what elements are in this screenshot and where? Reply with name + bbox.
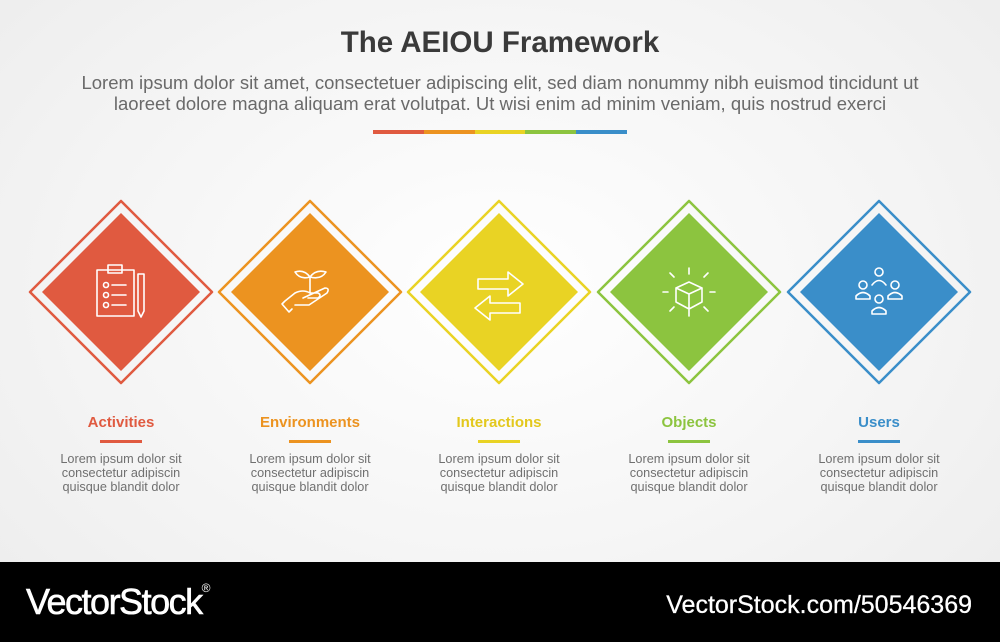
- footer brand: VectorStock®: [26, 581, 209, 622]
- item: interactions: consectetur adipiscin: [440, 466, 558, 480]
- diamond: users: [788, 201, 970, 383]
- item: users: [818, 414, 940, 494]
- diamond: activities: [30, 201, 212, 383]
- item: objects: quisque blandit dolor: [630, 480, 748, 494]
- item: activities: Activities: [88, 414, 154, 431]
- item: interactions: quisque blandit dolor: [440, 480, 558, 494]
- item: users: Users: [858, 414, 900, 431]
- footer url: VectorStock.com/50546369: [666, 591, 972, 619]
- diamond: environments: [219, 201, 401, 383]
- item: environments: Environments: [260, 414, 360, 431]
- title: The AEIOU Framework: [341, 26, 659, 59]
- item: objects: consectetur adipiscin: [630, 466, 748, 480]
- item: users: Lorem ipsum dolor sit: [818, 452, 940, 466]
- item: objects: [628, 414, 750, 494]
- item: interactions: Interactions: [456, 414, 542, 431]
- item: interactions: [438, 414, 560, 494]
- item: interactions: Lorem ipsum dolor sit: [438, 452, 560, 466]
- item: activities: quisque blandit dolor: [62, 480, 180, 494]
- item: users: quisque blandit dolor: [820, 480, 938, 494]
- subtitle: laoreet dolore magna aliquam erat volutpat. Ut wisi enim ad minim veniam, quis nostrud exerci: [114, 93, 886, 114]
- item: environments: [249, 414, 371, 494]
- footer: [0, 562, 1000, 642]
- item: objects: Lorem ipsum dolor sit: [628, 452, 750, 466]
- item: activities: [60, 414, 182, 494]
- labels: [60, 414, 940, 494]
- item: objects: Objects: [661, 414, 717, 431]
- item: environments: Lorem ipsum dolor sit: [249, 452, 371, 466]
- item: users: consectetur adipiscin: [820, 466, 938, 480]
- item: activities: Lorem ipsum dolor sit: [60, 452, 182, 466]
- diamond: interactions: [408, 201, 590, 383]
- item: activities: consectetur adipiscin: [62, 466, 180, 480]
- color bar: [373, 130, 627, 134]
- subtitle: Lorem ipsum dolor sit amet, consectetuer adipiscing elit, sed diam nonummy nibh euismod tincidunt ut: [81, 72, 919, 93]
- item: environments: quisque blandit dolor: [251, 480, 369, 494]
- diamond: objects: [598, 201, 780, 383]
- item: environments: consectetur adipiscin: [251, 466, 369, 480]
- subtitle: [81, 72, 919, 114]
